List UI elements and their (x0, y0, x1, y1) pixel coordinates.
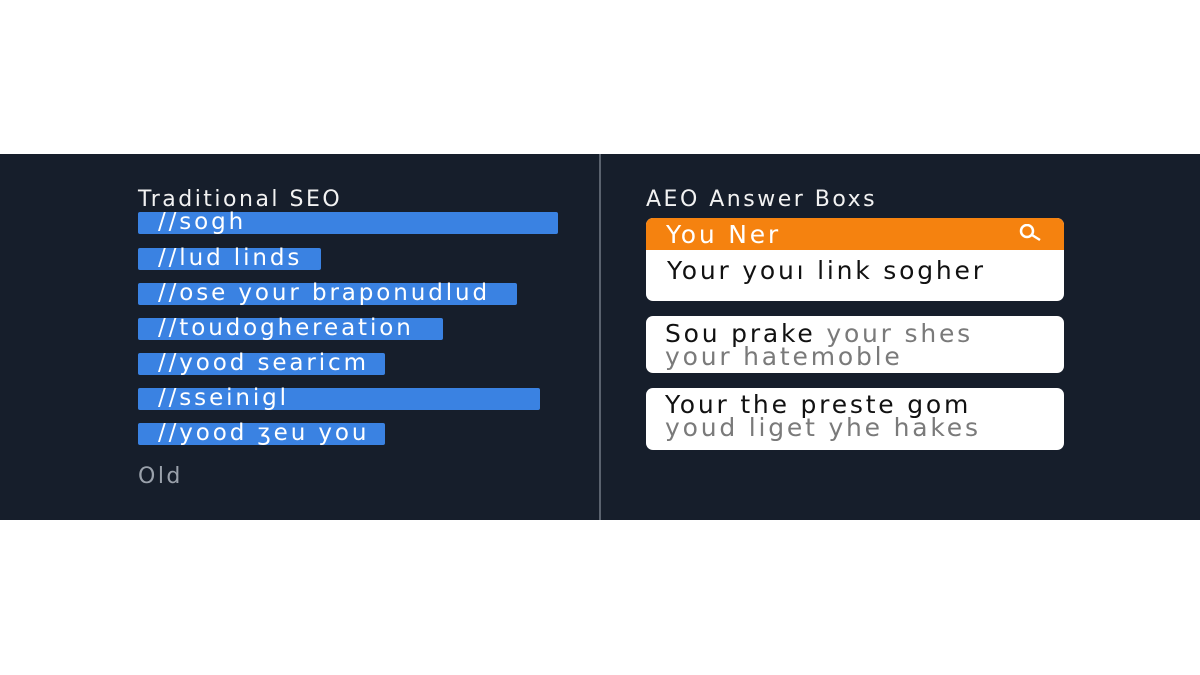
bar 3: //ose your braponudlud (158, 280, 490, 306)
answer box 2 (646, 316, 1064, 373)
orange header with search icon (646, 218, 1064, 250)
bar list: SEO links (138, 209, 558, 446)
heading: AEO Answer Boxs: AEO Answer Boxs (646, 187, 877, 212)
bar 1 (138, 212, 558, 234)
answer box 3: Your the preste gom (665, 390, 971, 419)
answer box 2: your hatemoble (665, 342, 903, 371)
bar 4: //toudoghereation (158, 315, 414, 341)
answer box 3 (646, 388, 1064, 450)
bar 7: //yood ʒeu you (158, 420, 369, 446)
bar 6 (138, 388, 540, 410)
bar 2 (138, 248, 321, 270)
bar 1: //sogh (158, 209, 246, 235)
icon: search (1020, 224, 1041, 241)
label: Old: Old (138, 464, 183, 489)
orange header with search icon: You Ner (666, 220, 781, 249)
heading: Traditional SEO: Traditional SEO (138, 187, 342, 212)
bar 6: //sseinigl (158, 385, 289, 411)
bar 5: //yood searicm (158, 350, 369, 376)
dark background band (0, 154, 1200, 520)
answer box 3: youd liget yhe hakes (665, 413, 981, 442)
answer box 1 (646, 218, 1064, 301)
bar 2: //lud linds (158, 245, 302, 271)
answer box 1: Your youı link sogher (667, 256, 986, 285)
answer box 2: Sou prake your shes (665, 319, 973, 348)
